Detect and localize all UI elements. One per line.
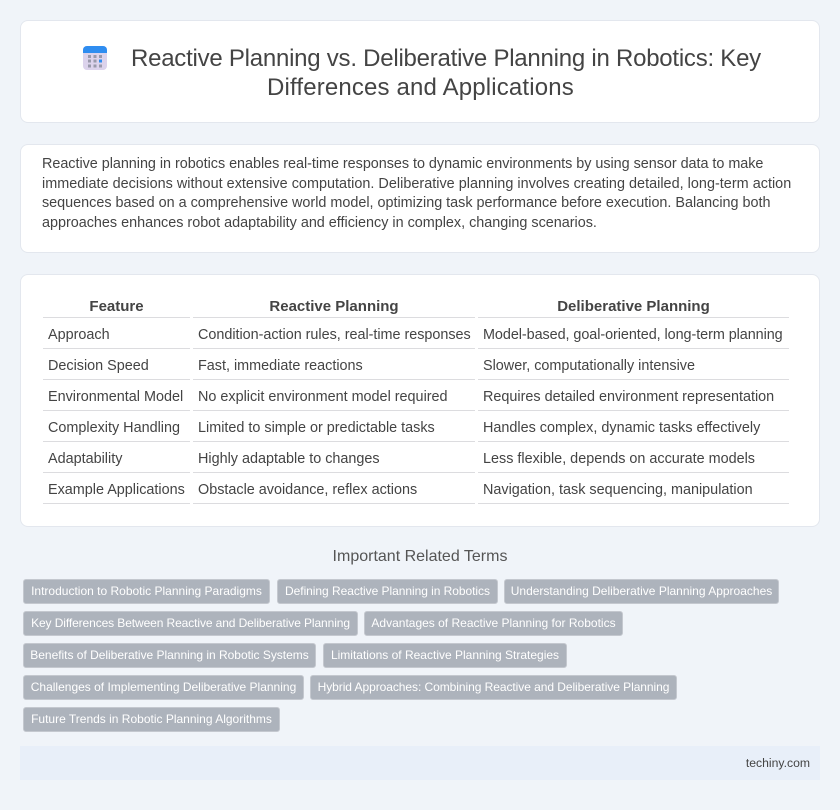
comparison table card: [20, 274, 820, 527]
title: Reactive Planning vs. Deliberative Planning in Robotics: Key: [131, 45, 761, 72]
related terms heading: Important Related Terms: [333, 548, 507, 565]
table header: Feature: [89, 298, 144, 315]
chip: Limitations of Reactive Planning Strategies: [331, 648, 559, 662]
row: adaptability: Adaptability: [48, 451, 122, 467]
intro card: [20, 144, 820, 253]
row: decision speed: [48, 358, 695, 374]
row: complexity handling: [48, 420, 760, 436]
chip: Benefits of Deliberative Planning in Robotic Systems: [30, 648, 309, 662]
comparison table: [43, 298, 789, 504]
intro text: Reactive planning in robotics enables real-time responses to dynamic environments by using sensor data to make: [42, 156, 763, 172]
row: adaptability: Less flexible, depends on accurate models: [483, 451, 755, 467]
row: example applications: Obstacle avoidance, reflex actions: [198, 482, 417, 498]
row: decision speed: Decision Speed: [48, 358, 149, 374]
row: approach: Model-based, goal-oriented, long-term planning: [483, 327, 783, 343]
footer source: techiny.com: [746, 756, 810, 770]
related terms chips: [23, 579, 779, 732]
chip: Advantages of Reactive Planning for Robotics: [371, 616, 616, 630]
row: environmental model: No explicit environment model required: [198, 389, 448, 405]
footer bar: [20, 746, 820, 780]
chip: [23, 643, 316, 668]
chip: [277, 579, 498, 604]
chip: Introduction to Robotic Planning Paradigms: [31, 584, 262, 598]
chip: [504, 579, 779, 604]
row: approach: Condition-action rules, real-time responses: [198, 327, 471, 343]
intro text: [42, 156, 791, 230]
chip: [23, 579, 270, 604]
chip: [23, 611, 358, 636]
chip: [364, 611, 623, 636]
title: [131, 45, 761, 101]
chip: Hybrid Approaches: Combining Reactive and Deliberative Planning: [318, 680, 669, 694]
row: environmental model: Environmental Model: [48, 389, 183, 405]
row: environmental model: Requires detailed environment representation: [483, 389, 774, 405]
row: complexity handling: Limited to simple or predictable tasks: [198, 420, 435, 436]
chip: [23, 675, 304, 700]
intro text: sequences based on a comprehensive world model, optimizing task performance before execution. Balancing both: [42, 195, 770, 211]
row: decision speed: Slower, computationally intensive: [483, 358, 695, 374]
table header: Deliberative Planning: [557, 298, 710, 315]
row: complexity handling: Handles complex, dynamic tasks effectively: [483, 420, 760, 436]
chip: Key Differences Between Reactive and Deliberative Planning: [31, 616, 350, 630]
row: example applications: Example Applications: [48, 482, 185, 498]
chip: Future Trends in Robotic Planning Algorithms: [31, 712, 272, 726]
chip: Defining Reactive Planning in Robotics: [285, 584, 490, 598]
table header: Reactive Planning: [269, 298, 399, 315]
chip: [323, 643, 567, 668]
intro text: approaches enhances robot adaptability and efficiency in complex, changing scenarios.: [42, 214, 597, 230]
row: environmental model: [48, 389, 774, 405]
row: complexity handling: Complexity Handling: [48, 420, 180, 436]
row: approach: Approach: [48, 327, 110, 343]
row: adaptability: [48, 451, 755, 467]
icon: calendar: [83, 46, 107, 70]
row: approach: [48, 327, 783, 343]
row: decision speed: Fast, immediate reactions: [198, 358, 363, 374]
chip: Understanding Deliberative Planning Approaches: [511, 584, 772, 598]
row: adaptability: Highly adaptable to changes: [198, 451, 380, 467]
chip: [310, 675, 677, 700]
chip: Challenges of Implementing Deliberative Planning: [31, 680, 296, 694]
table header: [89, 298, 710, 315]
title: Differences and Applications: [267, 74, 574, 101]
chip: [23, 707, 280, 732]
intro text: immediate decisions without extensive computation. Deliberative planning involves creating detailed, long-term action: [42, 176, 791, 192]
header card: [20, 20, 820, 123]
row: example applications: [48, 482, 753, 498]
row: example applications: Navigation, task sequencing, manipulation: [483, 482, 753, 498]
